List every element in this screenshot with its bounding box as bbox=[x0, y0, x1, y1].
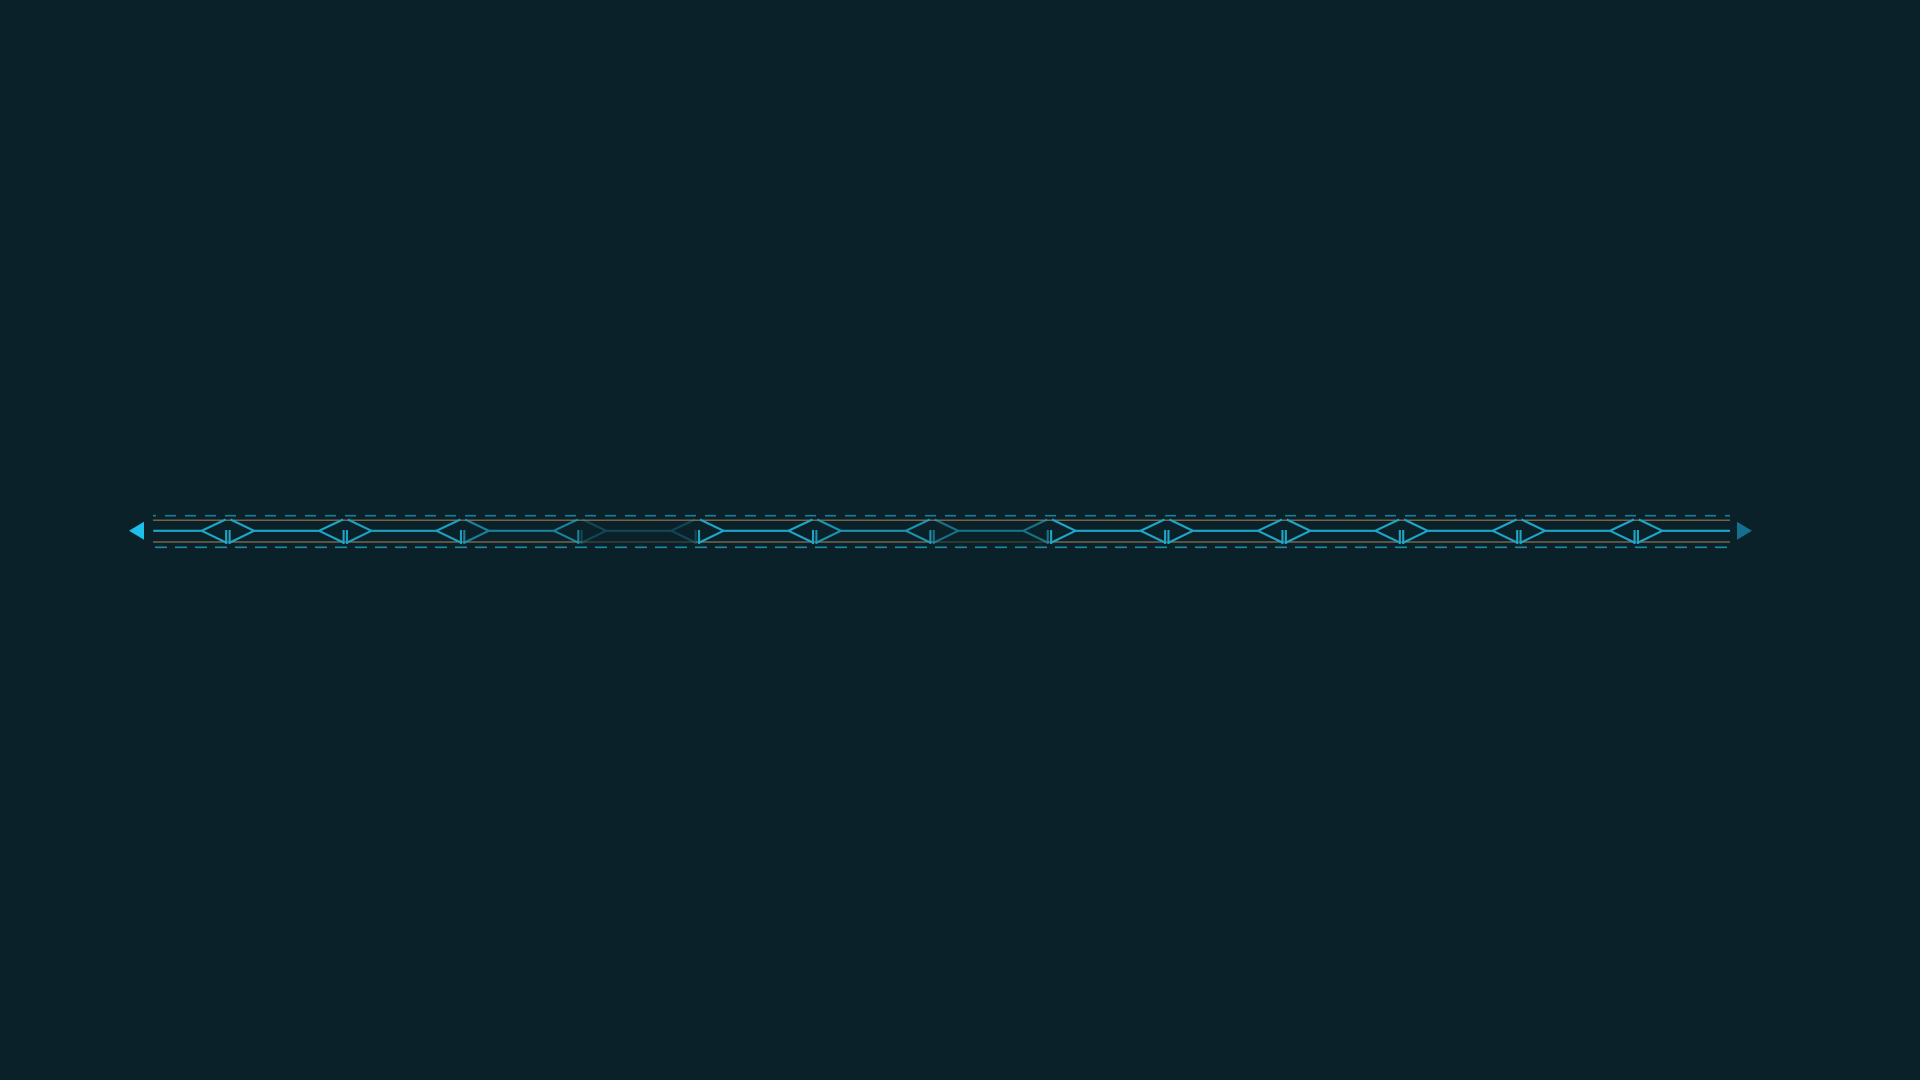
chevron unit 11 bbox=[1403, 520, 1517, 544]
chevron unit 8 bbox=[1051, 520, 1165, 544]
chevron unit 5 bbox=[699, 520, 813, 544]
chevron unit 7 bbox=[934, 520, 1048, 544]
dimmed bottom rail segments bbox=[582, 541, 1048, 543]
left end segment bbox=[153, 520, 226, 544]
chevron chain bbox=[153, 520, 1730, 544]
bottom dashed line bbox=[155, 546, 1727, 548]
right end segment bbox=[1638, 520, 1730, 544]
bottom amber rail bbox=[153, 541, 1730, 543]
chevron unit 1 bbox=[230, 520, 344, 544]
top amber rail bbox=[153, 519, 1730, 521]
chevron unit 12 bbox=[1521, 520, 1635, 544]
chevron unit 9 bbox=[1168, 520, 1282, 544]
chevron unit 3 bbox=[464, 520, 578, 544]
left arrowhead bbox=[129, 522, 144, 540]
chevron unit 2 bbox=[347, 520, 461, 544]
top dashed line bbox=[153, 515, 1730, 517]
chevron unit 4 bbox=[582, 520, 696, 544]
right arrowhead bbox=[1737, 522, 1752, 540]
chevron unit 6 bbox=[816, 520, 930, 544]
chevron unit 10 bbox=[1286, 520, 1400, 544]
